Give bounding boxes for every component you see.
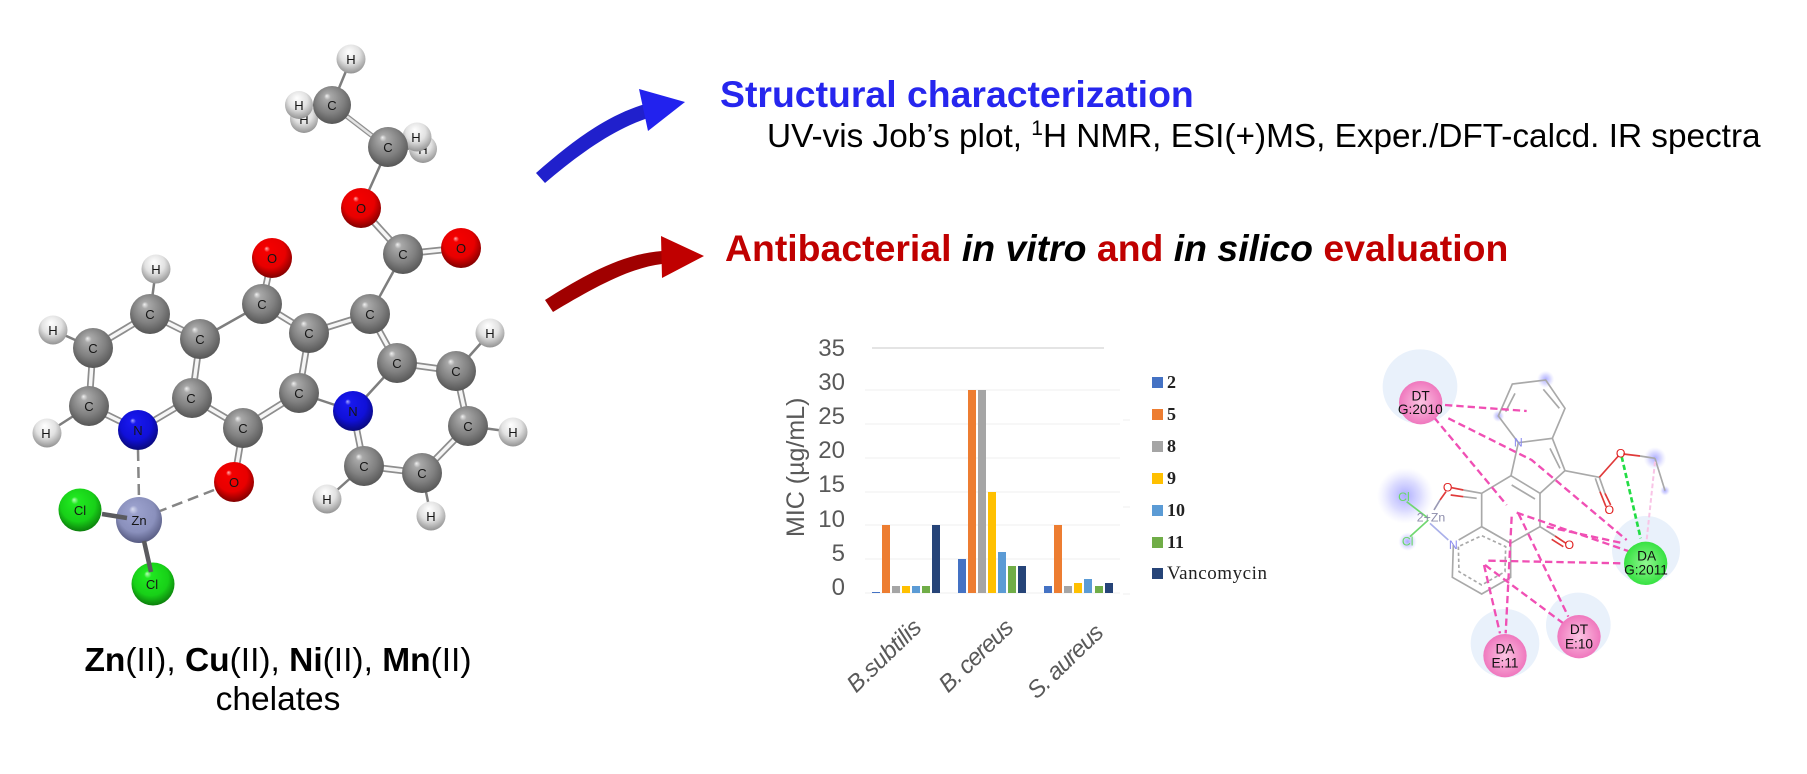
interaction dashes	[1434, 405, 1630, 633]
residue DA E:11: E:11	[1491, 655, 1519, 670]
hydrogen atoms: H	[151, 262, 161, 277]
chart legend: 5	[1167, 404, 1176, 424]
chlorine atoms: Cl	[146, 577, 158, 592]
residue DT E:10: E:10	[1565, 636, 1593, 651]
hydrogen atoms: H	[294, 98, 304, 113]
bars: B. cereus	[958, 390, 1026, 593]
nitrogen atoms: N	[348, 404, 358, 419]
chlorine atoms	[58, 488, 174, 606]
hydrogen atoms	[32, 44, 528, 530]
hydrogen atoms: H	[426, 509, 436, 524]
hydrogen atoms: H	[411, 130, 421, 145]
residue DT E:10	[1557, 615, 1601, 658]
chart legend: 8	[1167, 436, 1176, 456]
bars: B. subtilis	[872, 525, 940, 593]
chlorine atoms: Cl	[74, 503, 86, 518]
chart legend: Vancomycin	[1167, 563, 1268, 584]
ligand atom labels: O	[1616, 446, 1625, 460]
hydrogen atoms: H	[346, 52, 356, 67]
ligand atom labels: O	[1605, 503, 1614, 517]
caption: metal chelates	[84, 642, 472, 718]
bars: S. aureus	[1044, 525, 1113, 593]
hydrogen atoms: H	[485, 326, 495, 341]
nitrogen atoms: N	[133, 423, 143, 438]
hydrogen atoms: H	[299, 112, 309, 127]
hydrogen atoms: H	[418, 142, 428, 157]
residue DA G:2011: DA	[1637, 549, 1657, 564]
carbon atoms: C	[392, 356, 402, 371]
residue DA G:2011: G:2011	[1624, 563, 1668, 578]
residue DT G:2010: DT	[1412, 389, 1430, 404]
carbon atoms: C	[257, 297, 267, 312]
ligand heteroatom bonds	[1407, 454, 1640, 547]
ligand atom labels: 2+Zn	[1417, 511, 1445, 525]
ligand atom labels: O	[1443, 481, 1452, 495]
ligand atom labels: Cl	[1398, 490, 1410, 504]
residue DT G:2010	[1398, 381, 1443, 424]
solvent accessibility halos	[1383, 349, 1680, 678]
chart legend: 2	[1167, 372, 1176, 392]
ethyl C-C bond	[332, 105, 388, 148]
heading: structural characterization: Structural characterization	[720, 73, 1194, 115]
chart legend: 9	[1167, 468, 1176, 488]
carbon atoms: C	[294, 386, 304, 401]
ligand skeleton	[1430, 380, 1665, 594]
oxygen atoms: O	[267, 251, 277, 266]
carbon atoms: C	[383, 140, 393, 155]
carbon atoms: C	[195, 332, 205, 347]
y axis tick labels: 35	[818, 335, 845, 362]
residue DA E:11	[1483, 634, 1527, 677]
caption: metal chelates: chelates	[216, 681, 340, 718]
y axis tick labels: 0	[832, 574, 845, 601]
carbon atoms: C	[145, 307, 155, 322]
arrow: red curved arrow to antibacterial evaluation	[545, 236, 704, 312]
residue DT E:10: DT	[1570, 622, 1589, 637]
bar chart: MIC values	[782, 335, 1268, 704]
carbon atoms: C	[88, 341, 98, 356]
residue DA G:2011	[1624, 542, 1668, 585]
hydrogen bond dashes	[1622, 457, 1655, 540]
carbon atoms: C	[304, 326, 314, 341]
ligand atom labels: N	[1514, 436, 1523, 450]
arrow: blue curved arrow to structural characterization	[536, 89, 685, 183]
oxygen atoms	[214, 188, 481, 502]
x axis category labels: S. aureus	[1022, 619, 1109, 704]
y axis tick labels: 30	[818, 369, 845, 396]
ligand atom labels: O	[1565, 538, 1574, 552]
zinc atom	[102, 497, 162, 572]
carbon atoms: C	[463, 419, 473, 434]
caption: metal chelates: Zn(II), Cu(II), Ni(II), Mn(II)	[84, 642, 472, 679]
coordination bonds (dashed)	[138, 450, 214, 511]
y axis tick labels: 5	[832, 540, 845, 567]
text: structural methods: UV-vis Job’s plot,	[767, 118, 1022, 155]
carbon atoms: C	[365, 307, 375, 322]
heading: antibacterial evaluation: Antibacterial in vitro and in silico evaluation	[725, 227, 1508, 269]
single bonds	[47, 59, 513, 516]
carbon atoms: C	[238, 421, 248, 436]
chart legend	[1152, 372, 1268, 584]
carbon atoms: C	[84, 399, 94, 414]
ligand atom labels: Cl	[1402, 534, 1413, 548]
x axis category labels	[842, 614, 1109, 704]
nitrogen atoms	[118, 391, 373, 450]
carbon atoms: C	[451, 364, 461, 379]
x axis category labels: B. cereus	[934, 614, 1019, 698]
carbon atoms: C	[359, 459, 369, 474]
panel: Zn(II) chelate 3D molecular model	[32, 44, 528, 606]
oxygen atoms: O	[356, 201, 366, 216]
hydrogen atoms: H	[508, 425, 518, 440]
carbon atoms: C	[327, 98, 337, 113]
zinc atom: Zn	[131, 513, 147, 528]
y axis title: MIC (µg/mL)	[782, 398, 810, 537]
carbon atoms	[69, 86, 488, 493]
hydrogen atoms: H	[322, 492, 332, 507]
text: structural methods: H NMR, ESI(+)MS, Exper./DFT-calcd. IR spectra	[1043, 118, 1761, 155]
carbon atoms: C	[186, 391, 196, 406]
y axis tick labels: 15	[818, 471, 845, 498]
y axis tick labels: 25	[818, 403, 845, 430]
x axis category labels: B.subtilis	[842, 614, 927, 698]
ligand atom labels: N	[1449, 538, 1458, 552]
panel: in silico docking interaction diagram	[1377, 349, 1680, 678]
oxygen atoms: O	[229, 475, 239, 490]
residue DT G:2010: G:2010	[1398, 402, 1443, 417]
carbon atoms: C	[417, 466, 427, 481]
aromatic and double bonds	[89, 208, 468, 482]
hydrogen atoms: H	[48, 323, 58, 338]
y axis tick labels	[818, 335, 845, 601]
chart legend: 11	[1167, 532, 1184, 552]
ligand exposure blobs	[1377, 371, 1670, 551]
oxygen atoms: O	[456, 241, 466, 256]
y axis tick labels: 10	[818, 506, 845, 533]
carbon atoms: C	[398, 247, 408, 262]
y axis tick labels: 20	[818, 437, 845, 464]
hydrogen atoms: H	[41, 426, 51, 441]
ligand atom labels	[1398, 436, 1625, 552]
residue DA E:11: DA	[1496, 641, 1515, 656]
text: structural methods: 1	[1031, 117, 1043, 140]
chart legend: 10	[1167, 500, 1185, 520]
